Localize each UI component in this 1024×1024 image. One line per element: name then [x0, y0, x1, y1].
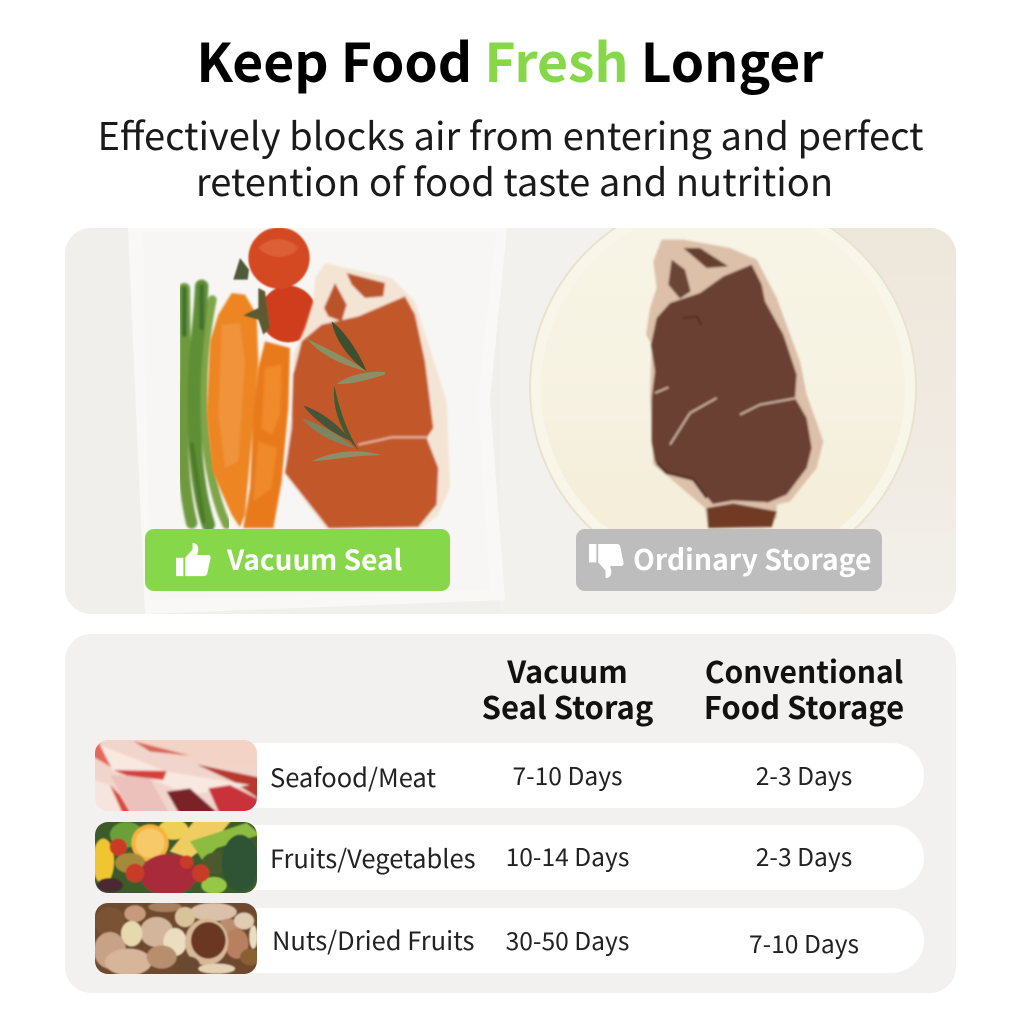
row background: seafood/meat: [96, 743, 924, 808]
image: fruits and vegetables: [95, 822, 257, 893]
value: fruits conventional: 2-3 Days: [756, 838, 852, 874]
subtitle: Effectively blocks air from entering and perfect: [97, 106, 924, 161]
column heading: vacuum seal storage: Vacuum: [507, 648, 628, 692]
label: vacuum seal: Vacuum Seal: [227, 539, 402, 579]
badge: vacuum seal: [145, 529, 450, 591]
column heading: conventional food storage: [704, 648, 904, 728]
column heading: vacuum seal storage: [482, 648, 653, 728]
row background: fruits/vegetables: [96, 825, 924, 890]
column heading: conventional food storage: Conventional: [705, 648, 903, 692]
value: fruits vacuum: 10-14 Days: [506, 838, 629, 874]
value: nuts vacuum: 30-50 Days: [506, 922, 629, 958]
carrots: [207, 293, 290, 528]
badge: ordinary storage: [576, 529, 882, 591]
subtitle: retention of food taste and nutrition: [196, 152, 833, 207]
ordinary storage steak: [646, 240, 823, 528]
row label: seafood/meat: Seafood/Meat: [270, 758, 436, 795]
label: ordinary storage: Ordinary Storage: [633, 538, 872, 579]
column heading: vacuum seal storage: Seal Storag: [482, 683, 653, 728]
title: Keep Food Fresh Longer: [196, 21, 824, 98]
vacuum bag: [128, 228, 507, 614]
value: seafood conventional: 2-3 Days: [756, 757, 852, 793]
rosemary sprigs: [302, 321, 385, 461]
column heading: conventional food storage: Food Storage: [704, 683, 904, 728]
value: seafood vacuum: 7-10 Days: [512, 757, 623, 793]
image: nuts and dried fruits: [95, 903, 257, 974]
row background: nuts/dried fruits: [96, 908, 924, 973]
icon: thumbs down: [589, 544, 624, 578]
tomatoes: [233, 227, 317, 342]
panel: food comparison photo: [65, 228, 956, 614]
row label: fruits/vegetables: Fruits/Vegetables: [270, 839, 476, 876]
row label: nuts/dried fruits: Nuts/Dried Fruits: [272, 921, 474, 958]
vacuum sealed steak: [285, 263, 450, 528]
icon: thumbs up: [176, 543, 211, 576]
plate: [529, 194, 917, 582]
asparagus: [183, 286, 227, 525]
panel: storage comparison table: [65, 634, 956, 993]
value: nuts conventional: 7-10 Days: [749, 925, 859, 961]
image: seafood and meat: [95, 740, 257, 811]
subtitle: [97, 106, 924, 207]
